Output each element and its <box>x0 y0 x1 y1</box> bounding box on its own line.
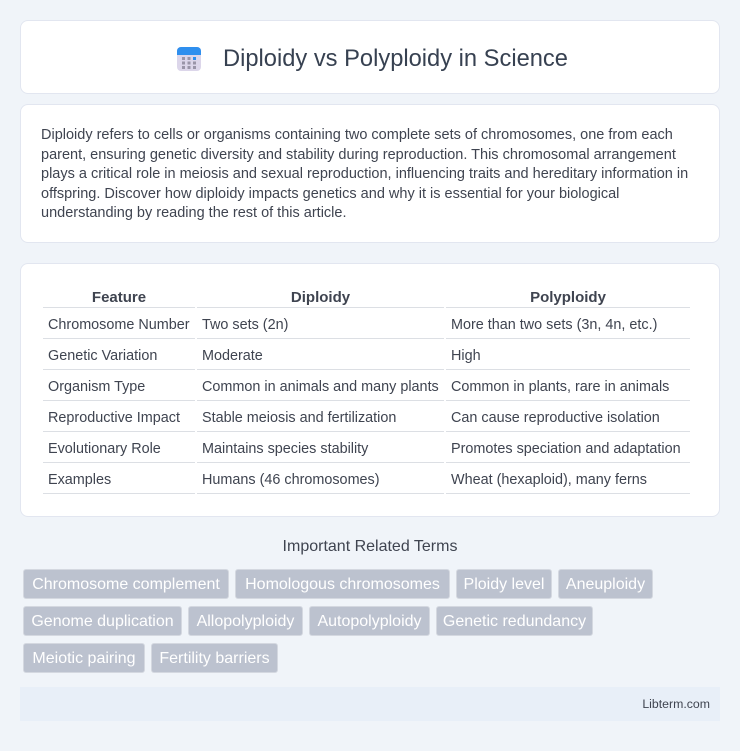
comparison table: Reproductive Impact <box>48 410 180 426</box>
comparison table: Maintains species stability <box>202 441 368 457</box>
table card <box>20 263 720 517</box>
comparison table: Diploidy <box>291 289 350 306</box>
comparison table: Humans (46 chromosomes) <box>202 472 380 488</box>
comparison table: Evolutionary Role <box>48 441 161 457</box>
intro paragraph: Diploidy refers to cells or organisms containing two complete sets of chromosomes, one from each <box>41 127 673 143</box>
related terms heading: Important Related Terms <box>283 538 457 555</box>
intro card <box>20 104 720 243</box>
intro paragraph: offspring. Discover how diploidy impacts genetics and why it is essential for your biological <box>41 186 619 202</box>
comparison table: Feature <box>92 289 146 306</box>
title: Diploidy vs Polyploidy in Science <box>223 46 568 72</box>
comparison table: Common in plants, rare in animals <box>451 379 669 395</box>
related term tags: Aneuploidy <box>566 576 645 593</box>
comparison table: Wheat (hexaploid), many ferns <box>451 472 647 488</box>
comparison table: Two sets (2n) <box>202 317 288 333</box>
header card <box>20 20 720 94</box>
comparison table: Organism Type <box>48 379 145 395</box>
comparison table: High <box>451 348 481 364</box>
related term tags: Allopolyploidy <box>197 613 294 630</box>
intro paragraph: understanding by reading the rest of this article. <box>41 205 346 221</box>
related term tags: Homologous chromosomes <box>245 576 440 593</box>
intro paragraph <box>41 127 688 221</box>
related term tags: Genetic redundancy <box>443 613 586 630</box>
related term tags: Fertility barriers <box>159 650 270 667</box>
icon: calendar <box>177 47 201 71</box>
comparison table: Polyploidy <box>530 289 606 306</box>
related term tags: Ploidy level <box>464 576 544 593</box>
intro paragraph: parent, ensuring genetic diversity and stability during reproduction. This chromosomal arrangement <box>41 147 676 163</box>
related term tags: Meiotic pairing <box>32 650 136 667</box>
related term tags: Genome duplication <box>31 613 174 630</box>
related term tags <box>23 569 653 673</box>
comparison table: Stable meiosis and fertilization <box>202 410 396 426</box>
related term tags: Chromosome complement <box>32 576 220 593</box>
intro paragraph: plays a critical role in meiosis and sexual reproduction, influencing traits and hereditary information in <box>41 166 688 182</box>
comparison table <box>43 289 690 494</box>
footer bar <box>20 687 720 721</box>
comparison table: Promotes speciation and adaptation <box>451 441 681 457</box>
related term tags: Autopolyploidy <box>317 613 422 630</box>
comparison table: Can cause reproductive isolation <box>451 410 660 426</box>
comparison table: Examples <box>48 472 111 488</box>
comparison table: Genetic Variation <box>48 348 157 364</box>
comparison table: Moderate <box>202 348 263 364</box>
comparison table: Common in animals and many plants <box>202 379 439 395</box>
comparison table: More than two sets (3n, 4n, etc.) <box>451 317 657 333</box>
comparison table: Chromosome Number <box>48 317 190 333</box>
footer credit: Libterm.com <box>642 697 710 711</box>
